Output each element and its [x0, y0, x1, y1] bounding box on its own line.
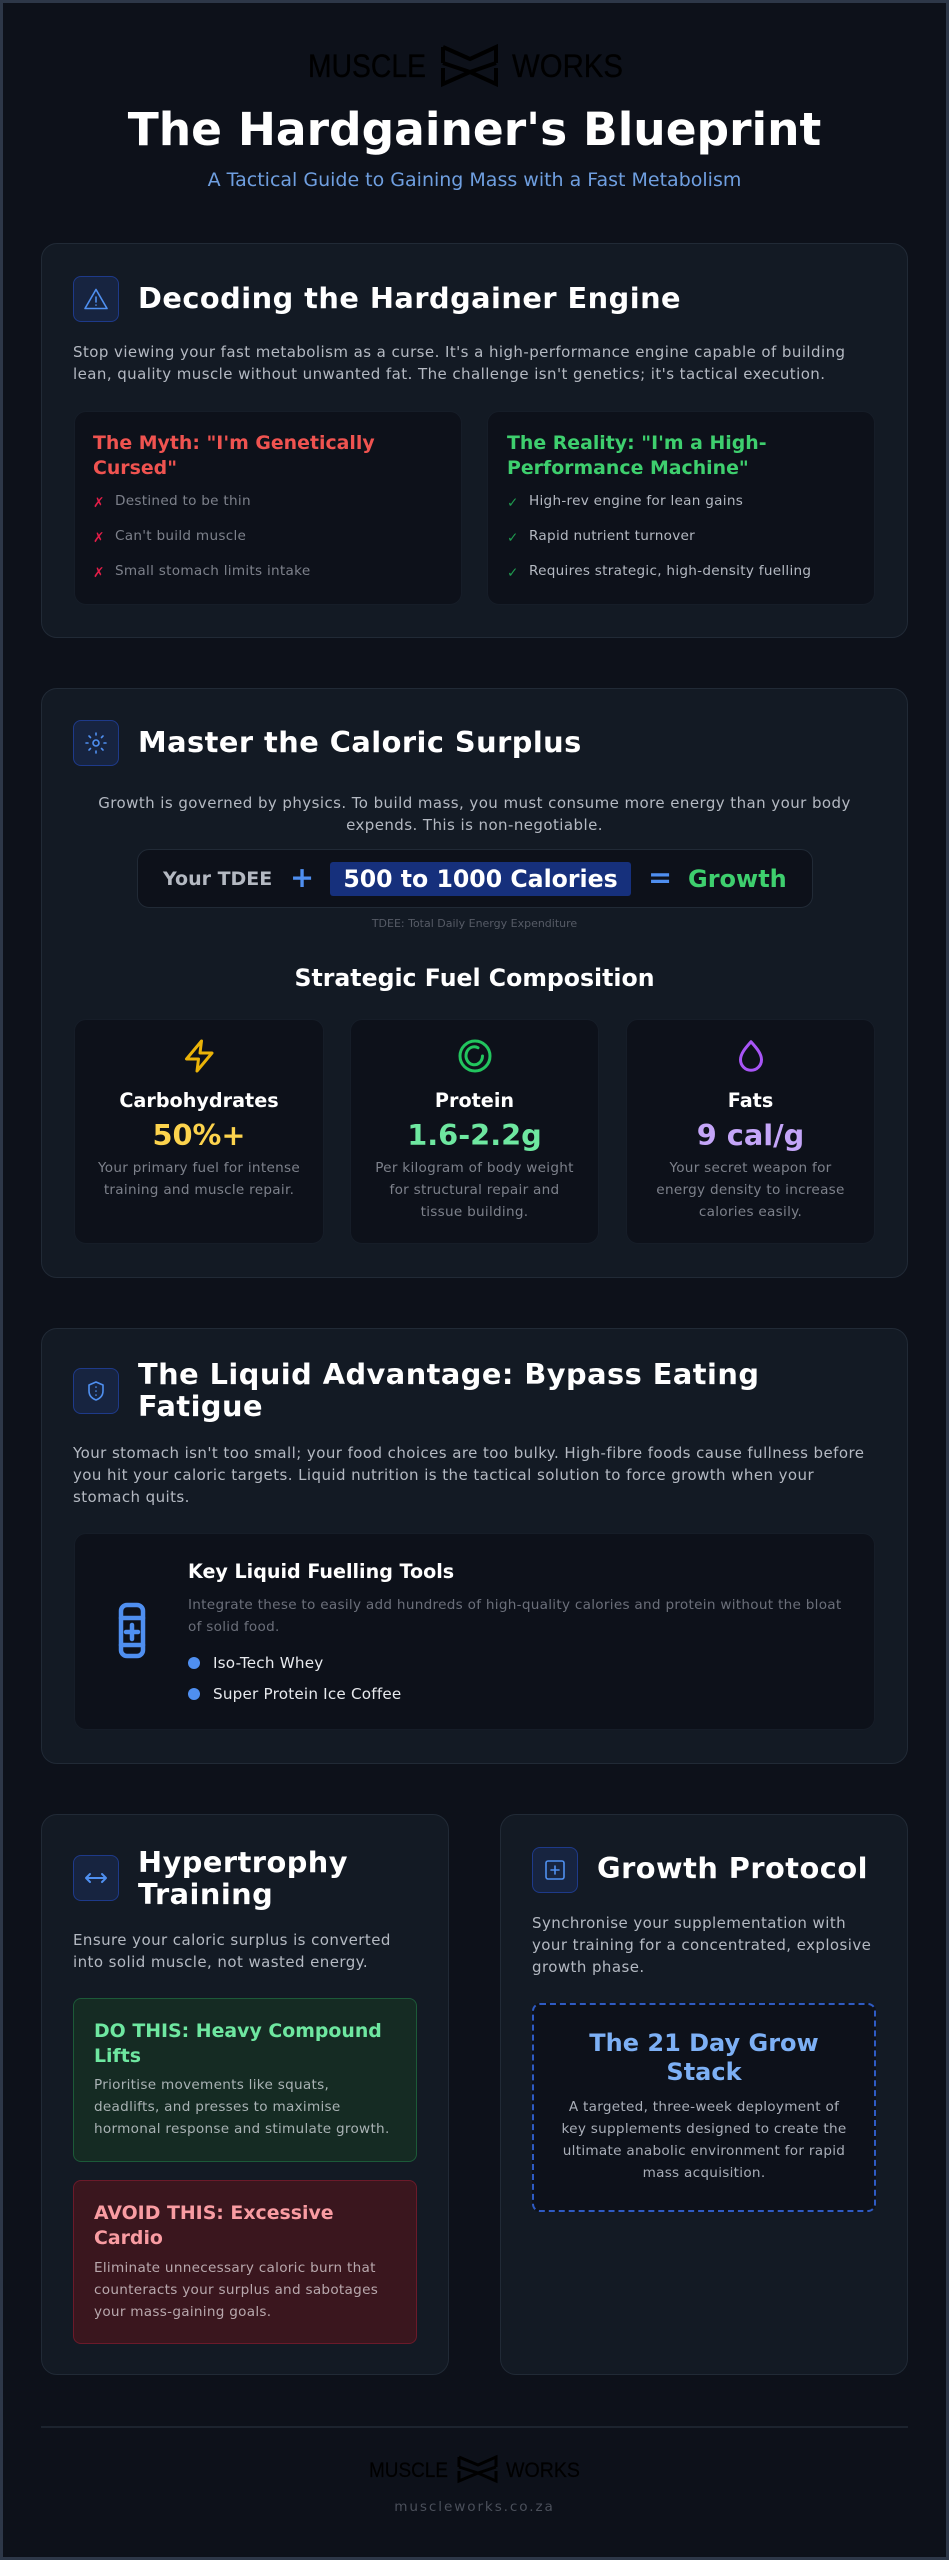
- heading: the liquid advantage: The Liquid Advantage: Bypass Eating: [138, 1357, 759, 1391]
- title: The Hardgainer's Blueprint: [128, 103, 821, 156]
- heading: strategic fuel composition: Strategic Fuel Composition: [294, 964, 655, 992]
- text: liquid intro: stomach quits.: [73, 1488, 190, 1506]
- list: reality items: ✓: [507, 530, 518, 546]
- text: stack description: key supplements designed to create the: [562, 2121, 846, 2137]
- text: do this description: [94, 2077, 390, 2137]
- logo: Muscle Works header: [308, 44, 623, 87]
- heading: 21 day grow stack: [589, 2029, 819, 2086]
- panel: hypertrophy training: [41, 1814, 449, 2375]
- panel: master the caloric surplus: [41, 688, 908, 1278]
- text: avoid this description: Eliminate unnecessary caloric burn that: [94, 2260, 376, 2276]
- text: hypertrophy intro: Ensure your caloric surplus is converted: [73, 1931, 391, 1949]
- text: stack description: A targeted, three-week deployment of: [569, 2099, 839, 2115]
- heading: master the caloric surplus: Master the Caloric Surplus: [138, 725, 582, 759]
- icon: warning triangle: [73, 276, 119, 322]
- heading: the reality: [507, 432, 767, 479]
- text: growth intro: [532, 1914, 871, 1976]
- panel: key liquid fuelling tools: [74, 1533, 875, 1730]
- panel: the liquid advantage: [41, 1328, 908, 1764]
- panel: the reality: [487, 411, 875, 605]
- note: TDEE definition: TDEE: Total Daily Energy Expenditure: [372, 917, 577, 930]
- text: liquid intro: Your stomach isn't too small; your food choices are too bulky. High-fibre foods cause fullness before: [73, 1444, 864, 1462]
- heading: do this: DO THIS: Heavy Compound: [94, 2020, 382, 2042]
- text: hypertrophy intro: into solid muscle, not wasted energy.: [73, 1953, 368, 1971]
- equation: TDEE plus surplus equals growth: Growth: [688, 865, 787, 893]
- equation: TDEE plus surplus equals growth: =: [648, 860, 672, 894]
- text: liquid intro: you hit your caloric targets. Liquid nutrition is the tactical solution to force growth when your: [73, 1466, 814, 1484]
- text: growth intro: Synchronise your supplementation with: [532, 1914, 846, 1932]
- heading: 21 day grow stack: Stack: [666, 2058, 742, 2086]
- text: growth intro: growth phase.: [532, 1958, 645, 1976]
- heading: hypertrophy training: [138, 1845, 348, 1911]
- text: fats description: Your secret weapon for: [669, 1160, 832, 1176]
- value: 50%+: 50%+: [152, 1118, 246, 1152]
- list: myth items: [93, 493, 310, 581]
- value: 9 cal/g: 9 cal/g: [697, 1118, 804, 1152]
- logo: Muscle Works footer: [369, 2455, 580, 2483]
- text: do this description: deadlifts, and presses to maximise: [94, 2099, 341, 2115]
- text: tools description: Integrate these to easily add hundreds of high-quality calories and protein without the bloat: [188, 1597, 842, 1613]
- text: stack description: ultimate anabolic environment for rapid: [563, 2143, 845, 2159]
- icon: plus square: [532, 1847, 578, 1893]
- icon: sun gear: [73, 720, 119, 766]
- icon: droplet: [739, 1040, 763, 1072]
- label: protein: Protein: [435, 1089, 514, 1112]
- heading: the myth: [93, 432, 375, 479]
- heading: the liquid advantage: [138, 1357, 759, 1423]
- heading: growth protocol: Growth Protocol: [597, 1851, 868, 1885]
- heading: do this: [94, 2020, 382, 2067]
- list: myth items: Can't build muscle: [115, 528, 246, 544]
- text: avoid this description: [94, 2260, 378, 2320]
- text: avoid this description: your mass-gaining goals.: [94, 2304, 271, 2320]
- panel: growth protocol: [500, 1814, 908, 2375]
- heading: the myth: Cursed": [93, 457, 177, 479]
- label: carbohydrates: Carbohydrates: [119, 1089, 279, 1112]
- list item: super protein ice coffee: Super Protein Ice Coffee: [213, 1685, 401, 1703]
- heading: the myth: The Myth: "I'm Genetically: [93, 432, 375, 454]
- panel: protein: [350, 1019, 599, 1244]
- text: tools description: [188, 1597, 842, 1635]
- equation: TDEE plus surplus equals growth: Your TDEE: [163, 868, 272, 890]
- text: hypertrophy intro: [73, 1931, 391, 1971]
- text: protein description: [375, 1160, 574, 1220]
- heading: avoid this: Cardio: [94, 2227, 163, 2249]
- text: protein description: Per kilogram of body weight: [375, 1160, 574, 1176]
- list: myth items: ✗: [93, 565, 104, 581]
- list: reality items: ✓: [507, 495, 518, 511]
- list: myth items: Small stomach limits intake: [115, 563, 310, 579]
- callout: avoid this: [73, 2180, 417, 2344]
- text: surplus intro: Growth is governed by physics. To build mass, you must consume more energy than your body: [98, 794, 851, 812]
- list: myth items: ✗: [93, 495, 104, 511]
- list: reality items: [507, 493, 811, 581]
- heading: hypertrophy training: Hypertrophy: [138, 1845, 348, 1879]
- subtitle: A Tactical Guide to Gaining Mass with a Fast Metabolism: [208, 169, 741, 191]
- icon: horizontal arrows: [73, 1855, 119, 1901]
- text: carbohydrates description: [98, 1160, 300, 1198]
- panel: the myth: [74, 411, 462, 605]
- callout: the 21 day grow stack: [532, 2003, 876, 2212]
- text: engine intro: [73, 343, 845, 383]
- text: surplus intro: expends. This is non-negotiable.: [346, 816, 603, 834]
- text: protein description: tissue building.: [421, 1204, 528, 1220]
- heading: do this: Lifts: [94, 2045, 141, 2067]
- text: stack description: mass acquisition.: [643, 2165, 765, 2181]
- logo: Muscle Works footer: WORKS: [506, 2459, 580, 2482]
- text: carbohydrates description: training and muscle repair.: [104, 1182, 294, 1198]
- icon: protein ring: [458, 1040, 492, 1072]
- heading: the reality: Performance Machine": [507, 457, 749, 479]
- list: myth items: Destined to be thin: [115, 493, 251, 509]
- callout: do this: [73, 1998, 417, 2162]
- list: reality items: ✓: [507, 565, 518, 581]
- heading: avoid this: AVOID THIS: Excessive: [94, 2202, 334, 2224]
- heading: avoid this: [94, 2202, 334, 2249]
- text: fats description: energy density to increase: [656, 1182, 845, 1198]
- text: growth intro: your training for a concentrated, explosive: [532, 1936, 871, 1954]
- list: reality items: High-rev engine for lean gains: [529, 493, 743, 509]
- equation: TDEE plus surplus equals growth: 500 to 1000 Calories: [343, 865, 618, 893]
- text: tools description: of solid food.: [188, 1619, 280, 1635]
- heading: decoding the hardgainer engine: Decoding the Hardgainer Engine: [138, 281, 681, 315]
- list: reality items: Requires strategic, high-density fuelling: [529, 563, 811, 579]
- equation: TDEE plus surplus equals growth: +: [290, 860, 314, 894]
- text: do this description: Prioritise movements like squats,: [94, 2077, 329, 2093]
- text: protein description: for structural repair and: [390, 1182, 559, 1198]
- text: engine intro: Stop viewing your fast metabolism as a curse. It's a high-performance engine capable of building: [73, 343, 845, 361]
- icon: shield: [73, 1368, 119, 1414]
- label: fats: Fats: [728, 1089, 773, 1112]
- text: engine intro: lean, quality muscle without unwanted fat. The challenge isn't genetics; it's tactical execution.: [73, 365, 825, 383]
- list: myth items: ✗: [93, 530, 104, 546]
- icon: lightning bolt: [184, 1040, 214, 1072]
- icon: shaker bottle: [118, 1602, 146, 1658]
- heading: 21 day grow stack: The 21 Day Grow: [589, 2029, 819, 2057]
- list: reality items: Rapid nutrient turnover: [529, 528, 695, 544]
- equation: TDEE plus surplus equals growth: [137, 849, 813, 908]
- panel: carbohydrates: [74, 1019, 324, 1244]
- text: stack description: [562, 2099, 846, 2181]
- heading: hypertrophy training: Training: [138, 1877, 273, 1911]
- text: do this description: hormonal response and stimulate growth.: [94, 2121, 390, 2137]
- heading: key liquid fuelling tools: Key Liquid Fuelling Tools: [188, 1560, 454, 1583]
- text: carbohydrates description: Your primary fuel for intense: [98, 1160, 300, 1176]
- logo: Muscle Works header: MUSCLE: [308, 48, 426, 84]
- panel: fats: [626, 1019, 875, 1244]
- panel: decoding the hardgainer engine: [41, 243, 908, 638]
- heading: the reality: The Reality: "I'm a High-: [507, 432, 767, 454]
- heading: the liquid advantage: Fatigue: [138, 1389, 263, 1423]
- value: 1.6-2.2g: 1.6-2.2g: [407, 1118, 542, 1152]
- logo: Muscle Works footer: MUSCLE: [369, 2459, 448, 2482]
- text: fats description: [656, 1160, 845, 1220]
- footer url: muscleworks.co.za: [394, 2499, 555, 2515]
- text: avoid this description: counteracts your surplus and sabotages: [94, 2282, 378, 2298]
- text: liquid intro: [73, 1444, 864, 1506]
- list item: iso-tech whey: Iso-Tech Whey: [213, 1654, 323, 1672]
- text: fats description: calories easily.: [699, 1204, 802, 1220]
- logo: Muscle Works header: WORKS: [512, 48, 623, 84]
- text: surplus intro: [98, 794, 851, 834]
